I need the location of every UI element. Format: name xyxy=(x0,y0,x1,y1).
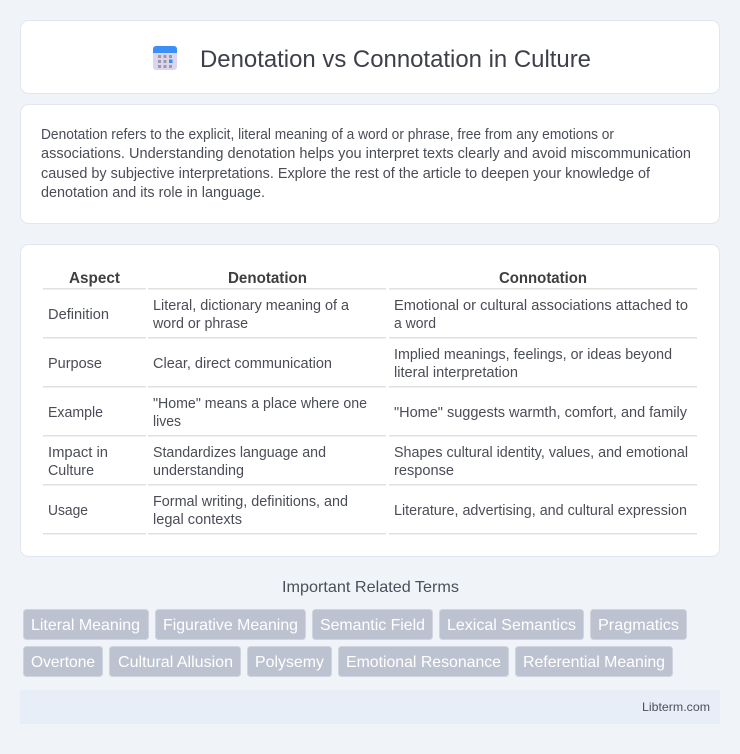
table header xyxy=(69,270,587,287)
intro text xyxy=(41,127,691,201)
row: usage xyxy=(48,494,687,528)
row: impact in culture: Shapes cultural identity, values, and emotional xyxy=(394,445,688,461)
icon: calendar xyxy=(153,46,177,70)
tag list: related terms xyxy=(24,610,686,676)
table header: Connotation xyxy=(499,270,587,287)
row: purpose: Implied meanings, feelings, or ideas beyond xyxy=(394,347,672,363)
row: definition: Definition xyxy=(48,307,109,323)
tag list: related terms: Cultural Allusion xyxy=(118,654,233,671)
tag list: related terms: Overtone xyxy=(31,654,95,671)
footer: Libterm.com xyxy=(642,700,710,714)
row: example: Example xyxy=(48,405,103,421)
tag list: related terms: Referential Meaning xyxy=(523,654,665,671)
tag list: related terms: Polysemy xyxy=(255,654,324,671)
panel: intro xyxy=(20,104,720,224)
row: impact in culture: Impact in xyxy=(48,445,108,461)
row: definition: a word xyxy=(394,316,436,332)
row: usage: legal contexts xyxy=(153,512,242,528)
row: example xyxy=(48,396,688,430)
intro text: denotation and its role in language. xyxy=(41,185,265,201)
row: definition: Emotional or cultural associations attached to xyxy=(394,298,688,314)
heading: related terms: Important Related Terms xyxy=(282,579,459,596)
row: impact in culture xyxy=(48,445,688,479)
row: example: "Home" suggests warmth, comfort, and family xyxy=(394,405,688,421)
tag list: related terms: Emotional Resonance xyxy=(346,654,501,671)
footer xyxy=(20,690,720,724)
tag list: related terms: Figurative Meaning xyxy=(163,617,298,634)
row: definition xyxy=(48,298,688,332)
row: definition: Literal, dictionary meaning of a xyxy=(153,298,349,314)
row: purpose: Purpose xyxy=(48,356,102,372)
intro text: Denotation refers to the explicit, literal meaning of a word or phrase, free from any emotions or xyxy=(41,127,614,143)
row: definition: word or phrase xyxy=(152,316,248,332)
row: usage: Literature, advertising, and cultural expression xyxy=(394,503,687,519)
row: impact in culture: understanding xyxy=(153,463,244,479)
tag list: related terms: Lexical Semantics xyxy=(447,617,576,634)
panel: comparison table xyxy=(20,244,720,556)
tag list: related terms: Pragmatics xyxy=(598,617,679,634)
title: Denotation vs Connotation in Culture xyxy=(200,46,591,73)
table header: Denotation xyxy=(228,270,307,287)
row: impact in culture: Standardizes language and xyxy=(153,445,326,461)
intro text: associations. Understanding denotation helps you interpret texts clearly and avoid miscommunication xyxy=(41,146,691,162)
table header: Aspect xyxy=(69,270,121,287)
row: example: "Home" means a place where one xyxy=(153,396,367,412)
row: impact in culture: Culture xyxy=(48,463,94,479)
row: purpose: literal interpretation xyxy=(394,365,518,381)
tag list: related terms: Literal Meaning xyxy=(31,617,140,634)
tag list: related terms: Semantic Field xyxy=(320,617,425,634)
row: purpose xyxy=(48,347,672,381)
row: example: lives xyxy=(153,414,181,430)
row: usage: Usage xyxy=(48,503,88,519)
row: usage: Formal writing, definitions, and xyxy=(153,494,348,510)
intro text: caused by subjective interpretations. Explore the rest of the article to deepen your knowledge of xyxy=(41,166,651,182)
row: impact in culture: response xyxy=(394,463,454,479)
panel: title header xyxy=(20,20,720,94)
row: purpose: Clear, direct communication xyxy=(153,356,332,372)
